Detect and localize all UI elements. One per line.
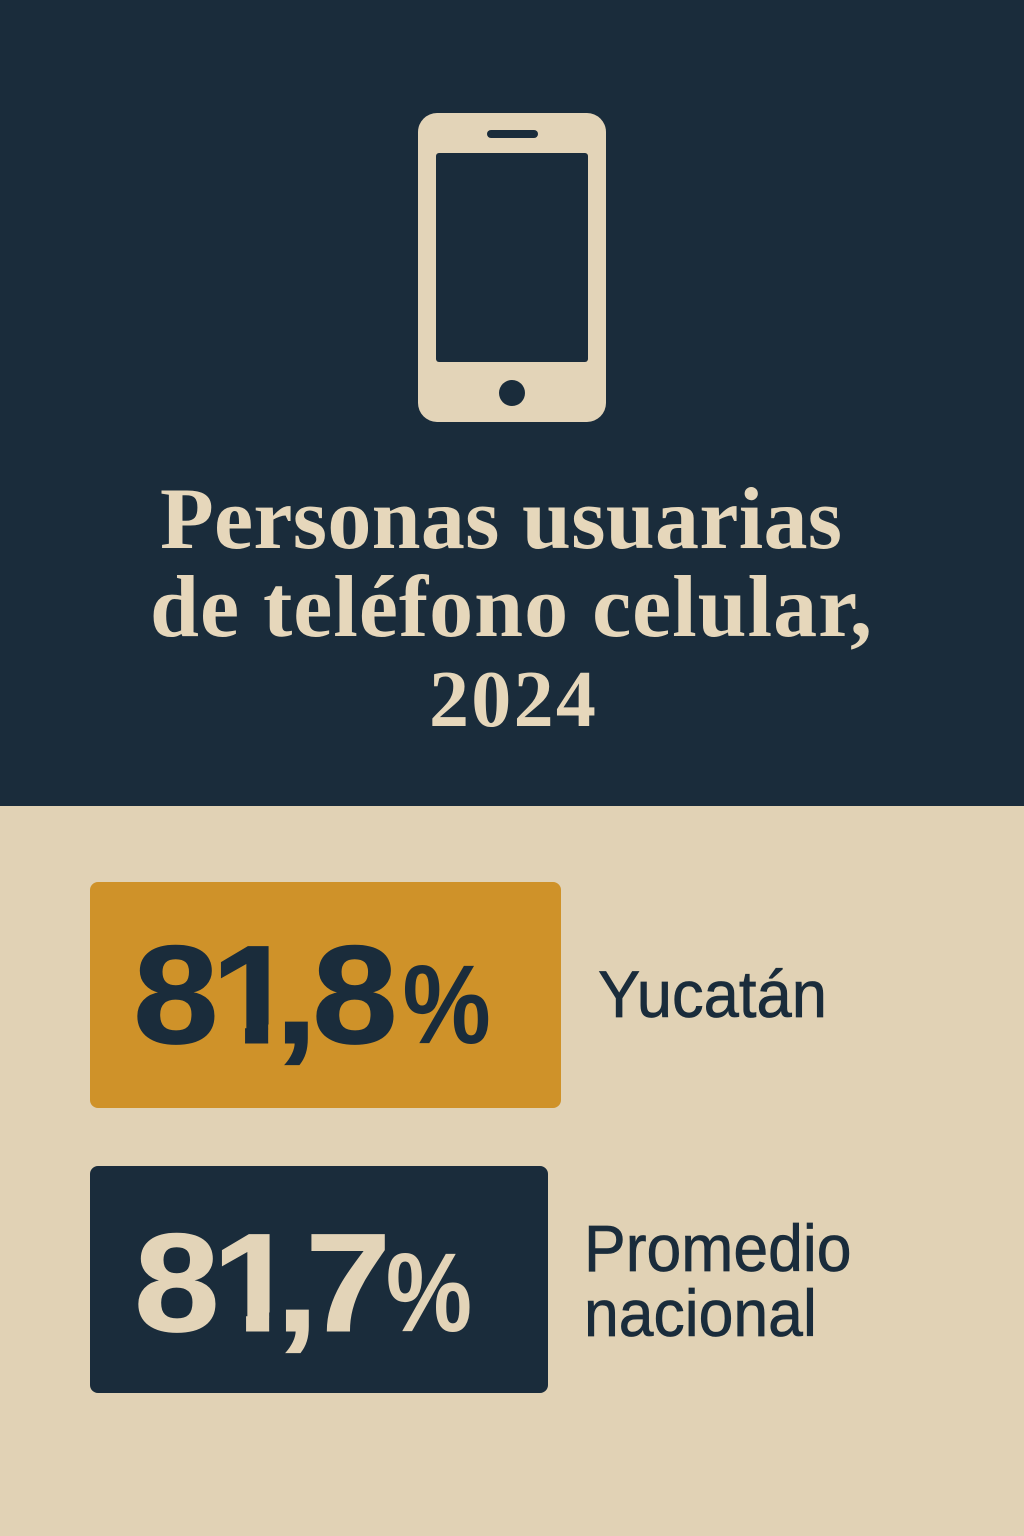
label: Promedio nacional: nacional — [584, 1276, 817, 1350]
title: de teléfono celular, — [150, 559, 873, 656]
value 81,7%: 8 ,7 — [134, 1204, 391, 1360]
icon: mobile phone — [418, 113, 606, 422]
value 81,8%: 1 — [211, 916, 297, 1072]
value 81,7%: 1 — [212, 1204, 298, 1360]
header panel — [0, 0, 1024, 806]
stat card: Promedio nacional — [90, 1166, 548, 1393]
value 81,7%: % — [386, 1230, 472, 1354]
label: Promedio nacional: Promedio — [584, 1211, 851, 1285]
stat card: Yucatán — [90, 882, 561, 1108]
label: Yucatán: Yucatán — [598, 957, 827, 1031]
title: Personas usuarias — [160, 471, 842, 568]
value 81,8%: % — [402, 942, 491, 1066]
value 81,8%: 8 ,8 — [133, 916, 398, 1072]
title: 2024 — [429, 656, 598, 744]
label: Promedio nacional — [584, 1211, 851, 1350]
title — [150, 471, 873, 744]
